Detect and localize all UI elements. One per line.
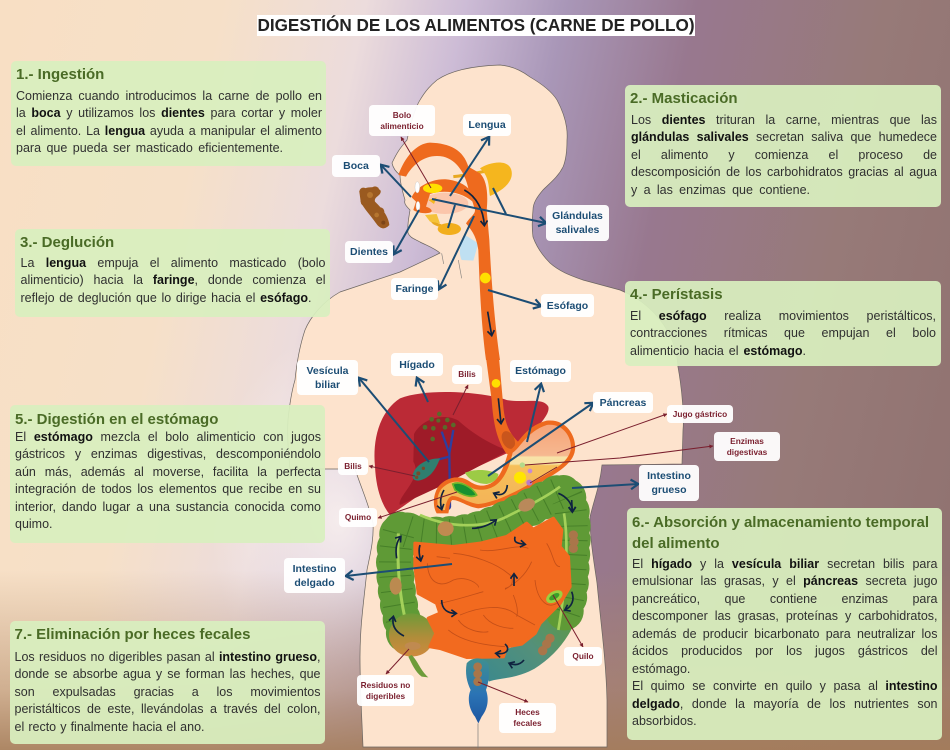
text: digestión en el estómago: integración de todos los elementos que recibe en su xyxy=(15,482,321,496)
label: quimo: Quimo xyxy=(345,512,371,522)
label: jugo gástrico: Jugo gástrico xyxy=(673,408,727,418)
text: absorción: El hígado y la vesícula biliar secretan bilis para xyxy=(632,557,938,571)
liver xyxy=(374,392,549,515)
label: bolo alimenticio: Bolo xyxy=(393,110,411,120)
text: absorción: además de producir bicarbonato para neutralizar los xyxy=(632,627,938,641)
label: intestino delgado xyxy=(284,558,345,593)
arrow: esófago xyxy=(488,290,541,306)
chyme xyxy=(453,483,477,496)
text: eliminación: Los residuos no digeribles pasan al intestino grueso, xyxy=(14,650,321,664)
arrow: bilis izquierda xyxy=(369,466,415,476)
large intestine: colon xyxy=(395,487,572,668)
label: glándulas salivales: Glándulas xyxy=(552,210,603,222)
text: masticación: descomposición de los carbohidratos gracias al agua xyxy=(631,165,937,179)
text: peristalsis: contracciones rítmicas que empujan el bolo xyxy=(630,326,936,340)
arrow: intestino delgado xyxy=(346,564,452,576)
pharynx and esophagus xyxy=(398,143,500,360)
arrow: estómago xyxy=(527,384,541,442)
label: faringe xyxy=(391,278,438,300)
label: esófago: Esófago xyxy=(547,300,588,312)
arrow: hígado xyxy=(417,378,428,402)
pancreas xyxy=(465,470,498,484)
label: bolo alimenticio xyxy=(369,105,435,136)
label: intestino grueso: Intestino xyxy=(647,470,691,482)
peristalsis arrows xyxy=(464,190,484,225)
feces xyxy=(390,496,579,686)
label: intestino delgado: Intestino xyxy=(293,562,336,574)
title: DIGESTIÓN DE LOS ALIMENTOS (CARNE DE POLLO) xyxy=(257,15,695,35)
panel: 6 absorción xyxy=(627,508,942,740)
label: heces fecales: Heces xyxy=(515,707,540,717)
heading: eliminación: 7.- Eliminación por heces fecales xyxy=(14,626,250,643)
label: faringe: Faringe xyxy=(396,283,433,295)
heading: ingestión: 1.- Ingestión xyxy=(16,66,104,83)
heading: masticación: 2.- Masticación xyxy=(630,90,738,107)
label: quilo: Quilo xyxy=(572,651,594,661)
text: eliminación: son expulsadas gracias a los movimientos xyxy=(14,685,320,699)
cecum xyxy=(389,613,434,657)
label: dientes xyxy=(345,241,393,263)
label: esófago xyxy=(541,294,594,317)
arrow: dientes xyxy=(394,210,419,254)
label: enzimas digestivas xyxy=(714,432,780,461)
label: vesícula biliar: biliar xyxy=(315,378,340,390)
text: masticación: y a las enzimas que contiene. xyxy=(631,183,810,197)
heading: deglución: 3.- Deglución xyxy=(20,234,114,251)
rectum and anus xyxy=(466,658,489,723)
chicken meat xyxy=(359,186,389,228)
label: quilo xyxy=(564,647,602,666)
text: ingestión xyxy=(16,89,322,155)
panel: 5 digestión en el estómago xyxy=(10,405,325,543)
text: digestión en el estómago xyxy=(15,430,321,531)
panel: 1 ingestión xyxy=(11,61,326,166)
arrow: lengua xyxy=(450,137,489,196)
bolus in stomach xyxy=(514,472,526,484)
text: absorción: emulsionar las grasas, y el páncreas secreta jugo xyxy=(632,574,938,588)
text: ingestión: Comienza cuando introducimos la carne de pollo en xyxy=(16,89,322,103)
appendix xyxy=(408,655,428,677)
text: deglución: alimenticio) hacia la faringe, donde comienza el xyxy=(20,273,326,287)
arrow: residuos no digeribles xyxy=(386,649,409,674)
blue callout arrows xyxy=(346,137,638,576)
label: bilis izquierda xyxy=(338,457,368,475)
salivary ducts xyxy=(430,170,493,228)
intestines xyxy=(389,487,579,748)
mouth cavity xyxy=(412,179,473,213)
label: dientes: Dientes xyxy=(350,246,388,258)
text: deglución xyxy=(20,256,326,305)
heading: digestión en el estómago: 5.- Digestión en el estómago xyxy=(15,411,218,428)
abdominal organs: liver and stomach xyxy=(374,350,575,515)
label: heces fecales: fecales xyxy=(513,718,542,728)
small intestine folds xyxy=(427,543,560,647)
text: absorción: estómago. xyxy=(632,662,690,676)
tongue xyxy=(422,193,468,214)
arrow: heces fecales xyxy=(478,682,528,702)
text: absorción: absorbidos. xyxy=(632,714,697,728)
label: estómago xyxy=(510,360,571,382)
arrow: glándulas salivales xyxy=(432,199,546,223)
arrow: bilis superior xyxy=(453,385,468,415)
text: deglución: reflejo de deglución que lo dirige hacia el esófago. xyxy=(20,291,312,305)
text: peristalsis xyxy=(630,309,936,358)
text: absorción: pancreático, que contiene enzimas para xyxy=(632,592,938,606)
label: glándulas salivales: salivales xyxy=(556,224,599,236)
trachea xyxy=(460,235,478,261)
text: absorción: ácidos producidos por los jugos gástricos del xyxy=(632,644,938,658)
label: hígado xyxy=(391,353,443,376)
heading: absorción: 6.- Absorción y almacenamiento temporal xyxy=(632,514,929,531)
small intestine xyxy=(415,518,570,657)
text: ingestión: el alimento. La lengua ayuda a manipular el alimento xyxy=(16,124,322,138)
label: lengua: Lengua xyxy=(468,119,506,131)
label: bilis superior xyxy=(452,365,482,384)
text: ingestión: para que pueda ser masticado eficientemente. xyxy=(16,141,283,155)
label: residuos no digeribles: digeribles xyxy=(366,690,405,700)
label: hígado: Hígado xyxy=(399,358,435,370)
label: heces fecales xyxy=(499,703,556,733)
stomach arrows xyxy=(498,398,501,423)
chyle xyxy=(544,588,565,606)
teeth xyxy=(415,182,420,193)
text: digestión en el estómago: quimo. xyxy=(15,517,53,531)
label: boca: Boca xyxy=(343,160,369,172)
text: digestión en el estómago: aún más, además al moverse, facilita la perfecta xyxy=(15,465,321,479)
label: enzimas digestivas: Enzimas xyxy=(730,436,764,446)
liver bile dots xyxy=(423,412,456,441)
panel: 7 eliminación xyxy=(10,621,325,744)
label: residuos no digeribles xyxy=(357,675,414,706)
text: masticación: el alimento y comienza el proceso de xyxy=(631,148,937,162)
text: ingestión: la boca y utilizamos los dientes para cortar y moler xyxy=(16,106,322,120)
label: estómago: Estómago xyxy=(515,365,566,377)
salivary glands xyxy=(480,162,512,196)
text: eliminación: el recto y finalmente hacia el ano. xyxy=(14,720,204,734)
label: bolo alimenticio: alimenticio xyxy=(380,120,424,130)
panel: 2 masticación xyxy=(625,85,941,207)
text: masticación xyxy=(631,113,937,197)
arrow: bolo alimenticio xyxy=(401,137,431,188)
label: páncreas xyxy=(593,392,653,413)
bile ducts xyxy=(430,430,453,509)
arrow: quimo xyxy=(378,492,457,518)
label: lengua xyxy=(463,114,511,136)
label: enzimas digestivas: digestivas xyxy=(727,446,767,456)
text: digestión en el estómago: El estómago mezcla el bolo alimenticio con jugos xyxy=(15,430,321,444)
label: quimo xyxy=(339,508,377,527)
label: bilis izquierda: Bilis xyxy=(344,460,362,470)
gallbladder xyxy=(413,458,440,481)
label: vesícula biliar: Vesícula xyxy=(306,364,349,376)
text: digestión en el estómago: interior, dando lugar a una sustancia conocida como xyxy=(15,500,321,514)
arrow: vesícula biliar xyxy=(359,378,429,462)
label: intestino delgado: delgado xyxy=(294,576,335,588)
arrow: faringe xyxy=(439,216,474,289)
label: glándulas salivales xyxy=(546,205,609,241)
label: intestino grueso xyxy=(639,465,699,501)
arrow: boca xyxy=(381,165,411,197)
arrow branches: glándulas xyxy=(448,188,506,228)
text: eliminación: peristálticos de este, llevándolas a través del colon, xyxy=(14,702,320,716)
arrow: quilo xyxy=(553,595,583,647)
red callout arrows xyxy=(369,137,713,702)
head organs: mouth, pharynx, esophagus, glands xyxy=(359,143,512,360)
text: absorción: El quimo se convirte en quilo y pasa al intestino xyxy=(632,679,938,693)
text: eliminación: donde se absorbe agua y se forman las heches, que xyxy=(14,667,320,681)
arrow branch: enzimas xyxy=(530,467,557,483)
label: jugo gástrico xyxy=(667,405,733,423)
arrow: páncreas xyxy=(488,403,593,476)
stomach and duodenum xyxy=(434,420,575,513)
label: vesícula biliar xyxy=(297,360,358,395)
arrow: enzimas digestivas xyxy=(525,446,713,465)
label: boca xyxy=(332,155,380,177)
text: peristalsis: El esófago realiza movimientos peristálticos, xyxy=(630,309,936,323)
label: residuos no digeribles: Residuos no xyxy=(361,680,410,690)
intestine movement arrows xyxy=(393,493,573,665)
label: intestino grueso: grueso xyxy=(651,484,686,496)
heading: absorción xyxy=(632,514,929,552)
text: masticación: glándulas salivales secretan saliva que humedece xyxy=(631,130,937,144)
body silhouette xyxy=(288,65,683,747)
arrow: jugo gástrico xyxy=(557,414,667,453)
tongue tip bolus xyxy=(428,197,437,204)
heading: peristalsis: 4.- Perístasis xyxy=(630,286,723,303)
arrow: intestino grueso xyxy=(572,484,638,488)
text: eliminación xyxy=(14,650,321,734)
label: páncreas: Páncreas xyxy=(600,396,646,408)
text: absorción: delgado, donde la mayoría de los nutrientes son xyxy=(632,697,938,711)
esophagus end xyxy=(485,350,522,454)
text: digestión en el estómago: gástricos y enzimas digestivas, descomponiéndolo xyxy=(15,447,321,461)
text: masticación: Los dientes trituran la carne, mientras que las xyxy=(631,113,937,127)
label: bilis superior: Bilis xyxy=(458,369,476,379)
text: peristalsis: alimenticio hacia el estómago. xyxy=(630,344,806,358)
panel: 4 peristalsis xyxy=(625,281,941,366)
gastric enzymes xyxy=(520,462,525,468)
heading: absorción: del alimento xyxy=(632,535,720,552)
text: absorción: descomponer las grasas, proteínas y carbohidratos, xyxy=(632,609,938,623)
text: absorción xyxy=(632,557,938,728)
bolus xyxy=(423,184,442,193)
text: deglución: La lengua empuja el alimento masticado (bolo xyxy=(20,256,326,270)
panel: 3 deglución xyxy=(15,229,330,317)
